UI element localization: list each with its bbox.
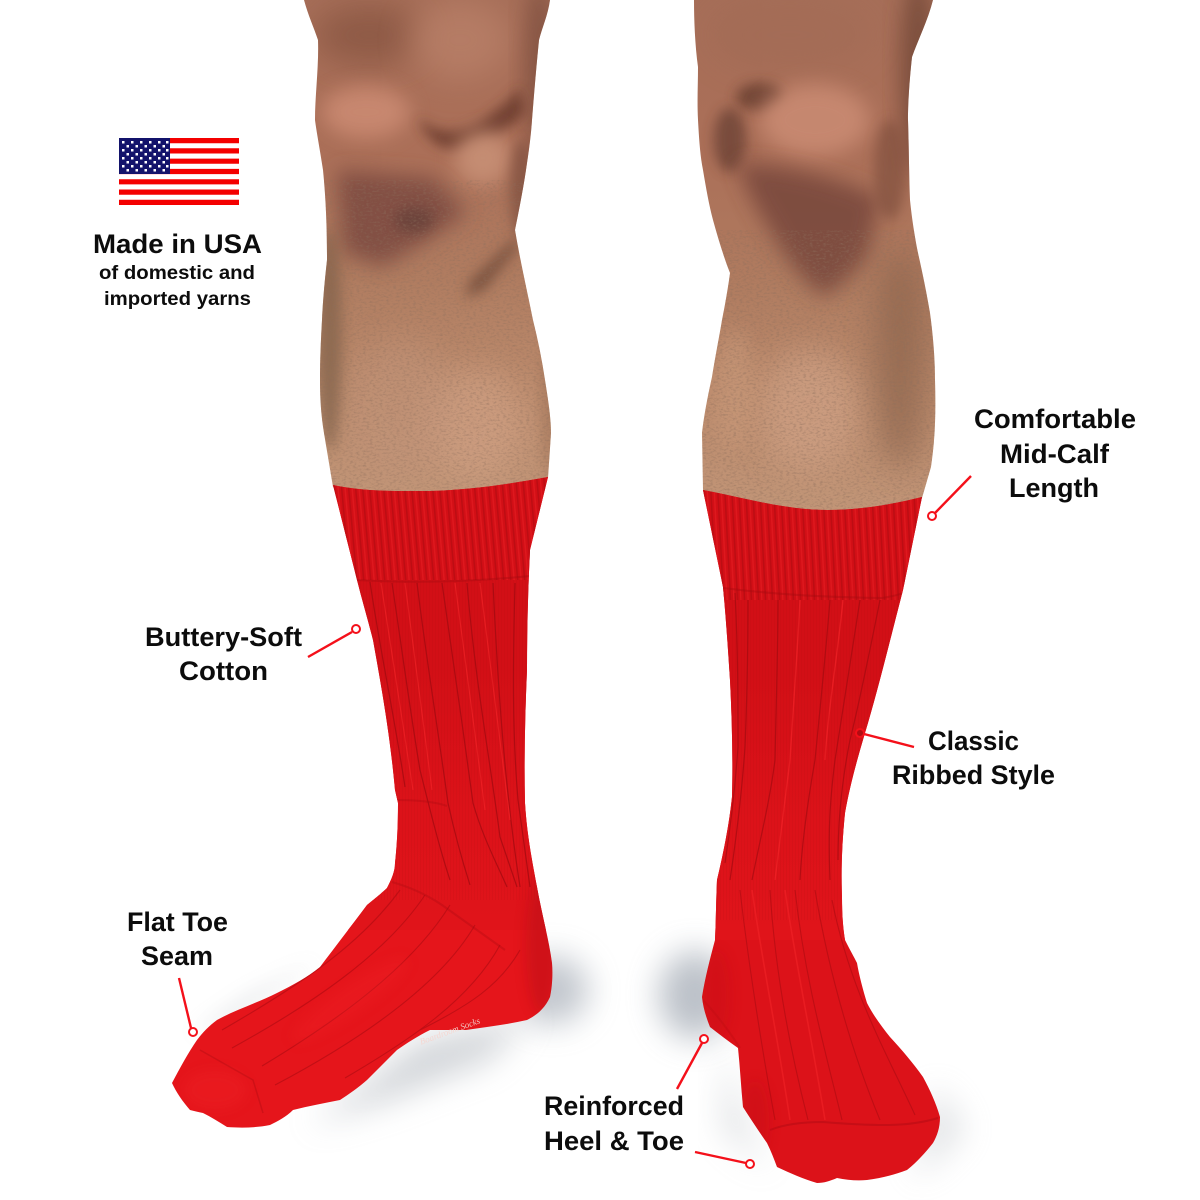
text: Made in USA: imported yarns xyxy=(104,288,251,310)
callout: reinforced heel and toe: Reinforced xyxy=(544,1091,684,1121)
callout: flat toe seam: Flat Toe xyxy=(127,907,228,937)
stars xyxy=(122,141,168,172)
callout: flat toe seam: Seam xyxy=(141,941,213,971)
sock brand mark: Boardroom Socks xyxy=(418,1015,482,1047)
callout: comfortable mid-calf length: Mid-Calf xyxy=(1000,439,1110,469)
text: Made in USA xyxy=(93,229,262,310)
right sock xyxy=(702,490,940,1183)
callout: buttery-soft cotton: Buttery-Soft xyxy=(145,622,302,652)
callout: reinforced heel and toe xyxy=(544,1035,754,1168)
callout: reinforced heel and toe: Heel & Toe xyxy=(544,1126,684,1156)
flag: USA xyxy=(119,138,239,205)
left knee shading xyxy=(314,0,558,480)
stripes xyxy=(119,138,239,205)
text: Made in USA: Made in USA xyxy=(93,229,262,259)
right sock ribs xyxy=(725,593,880,880)
left foot ribs xyxy=(222,890,520,1085)
left sock xyxy=(160,470,562,1140)
left sock cuff xyxy=(323,478,562,582)
canton xyxy=(119,138,170,174)
floor shadows xyxy=(190,951,965,1180)
right foot ribs xyxy=(740,890,915,1120)
callout: buttery-soft cotton: Cotton xyxy=(179,656,268,686)
callout: comfortable mid-calf length: Comfortable xyxy=(974,404,1136,434)
right leg xyxy=(694,0,936,510)
left leg xyxy=(304,0,551,491)
right knee shading xyxy=(710,0,936,470)
callout: classic ribbed style: Ribbed Style xyxy=(892,760,1055,790)
callout: classic ribbed style xyxy=(856,726,1055,790)
text: Made in USA: of domestic and xyxy=(99,262,255,284)
left sock ribs xyxy=(370,582,530,887)
callout: flat toe seam xyxy=(127,907,228,1036)
callout: comfortable mid-calf length xyxy=(928,404,1136,520)
callout: buttery-soft cotton xyxy=(145,622,360,686)
right sock cuff xyxy=(703,490,922,600)
callout: classic ribbed style: Classic xyxy=(928,726,1019,756)
callout: comfortable mid-calf length: Length xyxy=(1009,473,1099,503)
